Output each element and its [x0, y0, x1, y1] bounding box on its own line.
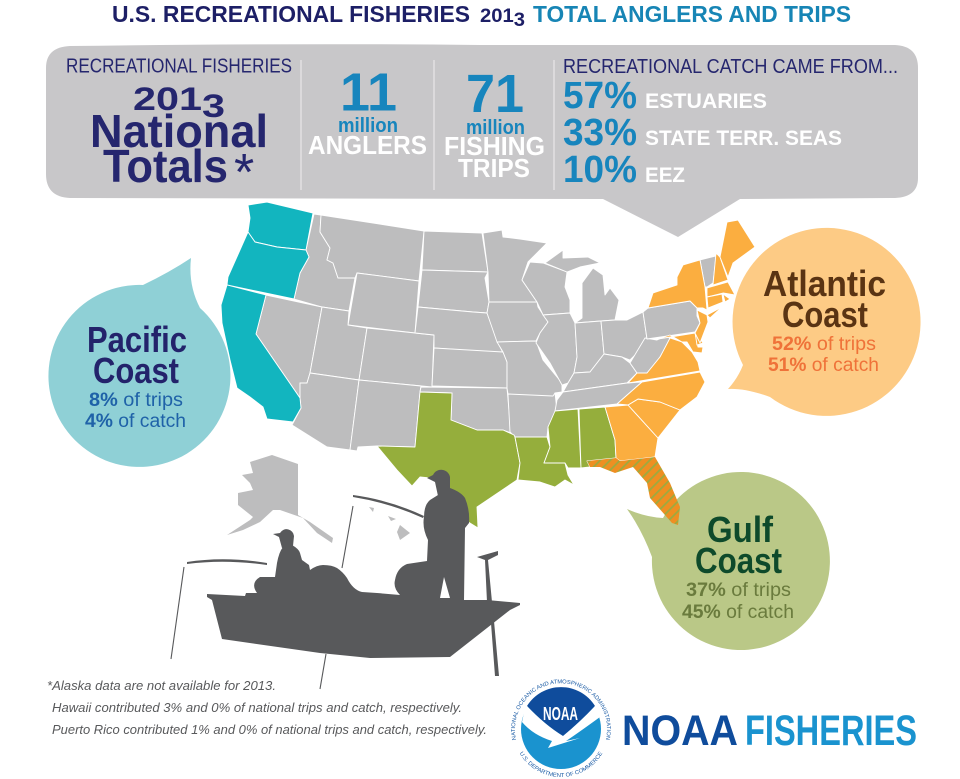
dividers: [301, 60, 554, 190]
region: interior states (grey): [256, 214, 716, 451]
callout text: pacific coast: 4% of catch: [85, 411, 186, 432]
national totals heading: National: [90, 105, 268, 157]
callout text: atlantic coast: 52% of trips: [772, 334, 876, 355]
region: pacific coast states (teal): [221, 202, 313, 422]
state: florida (shared atlantic and gulf): [587, 457, 680, 525]
callout text: pacific coast: 8% of trips: [89, 390, 183, 411]
national totals heading: *: [234, 144, 254, 202]
title: 3: [514, 10, 525, 31]
callout text: pacific coast: [85, 319, 187, 432]
rear angler head: [427, 470, 450, 496]
map: alaska: [227, 455, 333, 543]
callout text: pacific coast: Pacific: [87, 319, 187, 360]
logo: NOAA Fisheries wordmark: NOAA: [622, 707, 738, 755]
callout bubble: gulf: [627, 472, 830, 650]
callout text: atlantic coast: Coast: [782, 294, 868, 335]
title: [112, 1, 851, 31]
callout bubble: pacific: [48, 258, 230, 467]
front angler head: [273, 529, 294, 548]
stat: anglers: ANGLERS: [308, 130, 427, 160]
logo: NOAA seal: [511, 679, 611, 777]
stat: fishing trips: 71: [466, 64, 524, 124]
logo: NOAA seal: NOAA: [543, 704, 578, 724]
footnotes: *Alaska data are not available for 2013.: [47, 678, 276, 693]
logo: NOAA seal: NATIONAL OCEANIC AND ATMOSPHERIC ADMINISTRATION: [511, 679, 611, 740]
banner speech bubble: [46, 44, 918, 237]
illustration: fishing boat silhouette: [171, 470, 520, 689]
footnotes: [47, 678, 487, 737]
callout text: gulf coast: Coast: [695, 540, 782, 581]
stat: fishing trips: [444, 64, 545, 183]
callout text: pacific coast: Coast: [93, 350, 179, 391]
national totals heading: RECREATIONAL FISHERIES: [66, 56, 292, 78]
national totals heading: 201: [133, 81, 186, 117]
catch sources: ESTUARIES: [645, 90, 767, 113]
stat: fishing trips: million: [466, 117, 525, 139]
logo: NOAA Fisheries wordmark: [622, 707, 917, 755]
map: hawaii: [369, 507, 410, 540]
stat: fishing trips: TRIPS: [458, 153, 530, 183]
national totals heading: 3: [202, 88, 225, 124]
trolling motor: [477, 551, 499, 676]
map: contiguous United States: [221, 202, 755, 528]
catch sources: STATE TERR. SEAS: [645, 127, 842, 150]
catch sources: 57%: [563, 75, 637, 117]
catch sources: [563, 56, 898, 191]
callout text: gulf coast: Gulf: [707, 509, 774, 550]
logo: NOAA seal: U.S. DEPARTMENT OF COMMERCE: [520, 751, 602, 777]
fishing rod: front angler: [187, 559, 267, 565]
stat: anglers: million: [338, 115, 398, 137]
callout text: gulf coast: 45% of catch: [682, 602, 794, 623]
region: atlantic coast states (orange): [605, 220, 755, 461]
fishing rod: rear angler: [353, 495, 424, 518]
catch sources: RECREATIONAL CATCH CAME FROM...: [563, 56, 898, 78]
catch sources: 10%: [563, 149, 637, 191]
stat: anglers: [308, 62, 427, 160]
panel: national totals banner: [46, 44, 918, 237]
title: U.S. RECREATIONAL FISHERIES: [112, 1, 470, 27]
callout text: atlantic coast: [763, 263, 886, 376]
national totals heading: [66, 56, 292, 202]
region: gulf coast states (green): [377, 392, 616, 528]
national totals heading: Totals: [103, 140, 228, 192]
catch sources: EEZ: [645, 164, 685, 187]
footnotes: Hawaii contributed 3% and 0% of national trips and catch, respectively.: [52, 700, 462, 715]
title: 201: [480, 6, 512, 27]
title: TOTAL ANGLERS AND TRIPS: [533, 1, 851, 27]
catch sources: 33%: [563, 112, 637, 154]
stat: anglers: 11: [340, 62, 397, 122]
stat: fishing trips: FISHING: [444, 131, 545, 161]
callout text: atlantic coast: 51% of catch: [768, 355, 879, 376]
callout bubble: atlantic: [728, 228, 921, 416]
callout text: atlantic coast: Atlantic: [763, 263, 886, 304]
callout text: gulf coast: 37% of trips: [686, 580, 791, 601]
callout text: gulf coast: [682, 509, 794, 623]
boat and anglers: [207, 488, 520, 658]
fishing lines: [171, 506, 353, 689]
footnotes: Puerto Rico contributed 1% and 0% of national trips and catch, respectively.: [52, 722, 487, 737]
